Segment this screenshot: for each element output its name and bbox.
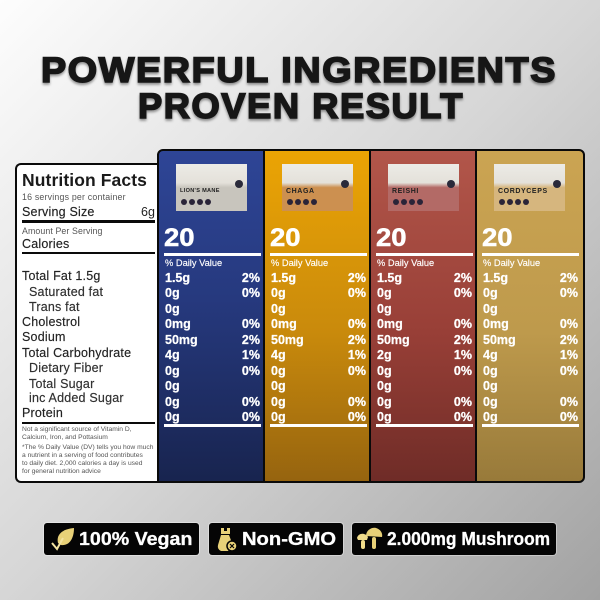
calories label: Calories — [22, 237, 69, 251]
badge: 100% vegan: 100% Vegan — [79, 529, 192, 549]
nutrient values: 4g — [271, 348, 286, 362]
nutrient values: 0% — [348, 395, 366, 409]
nutrient values: 0g — [271, 302, 286, 316]
nutrient values: 0% — [560, 395, 578, 409]
nutrient values: 4g — [483, 348, 498, 362]
nutrient values: 0% — [242, 395, 260, 409]
badge: 2,000mg mushroom: 2.000mg Mushroom — [387, 529, 550, 549]
nutrient values: 0g — [483, 395, 498, 409]
nutrient labels: Cholestrol — [22, 315, 80, 329]
product bag: reishi — [388, 164, 459, 211]
panel: nutrition facts labels — [15, 163, 160, 483]
nutrient values: 50mg — [271, 333, 304, 347]
nutrient values: 0g — [377, 286, 392, 300]
nutrient values: 0% — [242, 286, 260, 300]
nutrient values: 0g — [271, 379, 286, 393]
nutrient values: 1% — [242, 348, 260, 362]
nutrient values: 2% — [560, 333, 578, 347]
nutrient values: 0% — [242, 410, 260, 424]
nutrient values: 0g — [483, 302, 498, 316]
product bag: chaga — [282, 164, 353, 211]
heading: nutrition facts: Nutrition Facts — [22, 170, 147, 190]
daily value heading: % Daily Value — [483, 258, 540, 268]
nutrient values: 2g — [377, 348, 392, 362]
nutrient values: 0mg — [271, 317, 297, 331]
nutrient values: 0g — [165, 379, 180, 393]
product bag: lion's mane — [176, 164, 247, 211]
nutrient values: 4g — [165, 348, 180, 362]
panel: cordyceps column — [475, 149, 585, 483]
panel: chaga column — [263, 149, 371, 483]
icon: mushrooms — [357, 528, 382, 549]
nutrient values: 1.5g — [377, 271, 402, 285]
product bag: cordyceps: CORDYCEPS — [498, 188, 548, 195]
nutrient values: 0g — [483, 379, 498, 393]
nutrient values: 0mg — [377, 317, 403, 331]
product bag: cordyceps — [494, 164, 565, 211]
nutrient labels: Total Carbohydrate — [22, 346, 131, 360]
nutrient values: 0g — [271, 395, 286, 409]
daily value heading: % Daily Value — [271, 258, 328, 268]
product bag: lion's mane: LION'S MANE — [180, 188, 220, 194]
title: POWERFUL INGREDIENTS — [41, 51, 557, 90]
calories value: 20 — [482, 224, 513, 252]
footnote — [22, 426, 154, 475]
nutrient values: 2% — [242, 333, 260, 347]
footnote: Not a significant source of Vitamin D, — [22, 426, 132, 433]
nutrient values: 1.5g — [271, 271, 296, 285]
nutrient values: 0g — [271, 364, 286, 378]
nutrient values: 0% — [348, 364, 366, 378]
nutrient values: 1% — [348, 348, 366, 362]
nutrient values: 0g — [377, 302, 392, 316]
calories value: 20 — [164, 224, 195, 252]
nutrient values: 2% — [560, 271, 578, 285]
nutrient values: 0% — [348, 286, 366, 300]
badge: non-gmo — [209, 523, 343, 555]
nutrient values: 0% — [242, 317, 260, 331]
nutrient values: 0g — [165, 395, 180, 409]
icon: leaf with check — [51, 528, 74, 551]
daily value heading: % Daily Value — [377, 258, 434, 268]
nutrient values: 0mg — [483, 317, 509, 331]
calories value: 20 — [376, 224, 407, 252]
nutrient values: 0g — [165, 364, 180, 378]
amount per serving: Amount Per Serving — [22, 226, 103, 236]
footnote: to daily diet. 2,000 calories a day is used — [22, 460, 142, 467]
calories value: 20 — [270, 224, 301, 252]
servings per container: 16 servings per container — [22, 192, 126, 202]
nutrient values: 0% — [454, 410, 472, 424]
nutrient values: 0g — [165, 410, 180, 424]
nutrient values: 0% — [454, 317, 472, 331]
serving size: Serving Size — [22, 205, 95, 219]
nutrient values: 50mg — [377, 333, 410, 347]
daily value heading: % Daily Value — [165, 258, 222, 268]
panel: lion's mane column — [157, 149, 265, 483]
nutrient values — [165, 271, 260, 424]
nutrient values: 0g — [483, 364, 498, 378]
nutrient values: 1% — [454, 348, 472, 362]
footnote: a nutrient in a serving of food contributes — [22, 452, 143, 459]
nutrient values: 0g — [271, 410, 286, 424]
nutrient values: 0g — [377, 379, 392, 393]
nutrient values: 1.5g — [165, 271, 190, 285]
nutrient values: 2% — [454, 333, 472, 347]
nutrient values: 50mg — [165, 333, 198, 347]
product bag: chaga: CHAGA — [286, 188, 315, 195]
nutrient values: 0% — [454, 395, 472, 409]
nutrient values: 0g — [377, 410, 392, 424]
badge: 2,000mg mushroom — [352, 523, 556, 555]
nutrient values: 1.5g — [483, 271, 508, 285]
serving size value: 6g — [141, 205, 155, 219]
nutrient values: 2% — [454, 271, 472, 285]
nutrient values: 50mg — [483, 333, 516, 347]
nutrient values: 0g — [165, 286, 180, 300]
nutrient labels: Protein — [22, 406, 63, 420]
nutrient values: 0% — [560, 364, 578, 378]
panel: reishi column — [369, 149, 477, 483]
nutrient values: 0g — [165, 302, 180, 316]
title — [41, 51, 557, 126]
nutrient values: 1% — [560, 348, 578, 362]
nutrient values: 0g — [377, 395, 392, 409]
nutrient labels — [22, 269, 131, 420]
nutrient values: 0% — [560, 317, 578, 331]
nutrient values: 0% — [560, 410, 578, 424]
badge: non-gmo: Non-GMO — [242, 529, 336, 549]
nutrient labels: Dietary Fiber — [29, 361, 103, 375]
nutrient values — [271, 271, 366, 424]
footnote: for general nutrition advice — [22, 468, 101, 475]
product bag: reishi: REISHI — [392, 188, 419, 195]
nutrient values: 0% — [348, 317, 366, 331]
nutrient values: 0% — [348, 410, 366, 424]
nutrient values: 0g — [483, 286, 498, 300]
nutrient labels: Sodium — [22, 330, 66, 344]
nutrient values: 2% — [348, 333, 366, 347]
nutrient labels: Trans fat — [29, 300, 80, 314]
nutrient values: 2% — [242, 271, 260, 285]
nutrient values — [377, 271, 472, 424]
nutrient values: 0g — [271, 286, 286, 300]
nutrient labels: Total Sugar — [29, 377, 94, 391]
nutrient labels: Total Fat 1.5g — [22, 269, 101, 283]
nutrient values: 0% — [454, 364, 472, 378]
nutrient values: 2% — [348, 271, 366, 285]
footnote: Calcium, Iron, and Pottasium — [22, 434, 108, 441]
nutrient values — [483, 271, 578, 424]
nutrient values: 0% — [560, 286, 578, 300]
title: PROVEN RESULT — [138, 87, 464, 126]
nutrient values: 0% — [454, 286, 472, 300]
nutrient values: 0mg — [165, 317, 191, 331]
nutrient values: 0g — [377, 364, 392, 378]
icon: corn with cross — [218, 528, 236, 551]
nutrient labels: Saturated fat — [29, 285, 103, 299]
nutrient values: 0g — [483, 410, 498, 424]
footnote: *The % Daily Value (DV) tells you how much — [22, 444, 153, 451]
badge: 100% vegan — [44, 523, 199, 555]
nutrient values: 0% — [242, 364, 260, 378]
nutrient labels: inc Added Sugar — [29, 391, 124, 405]
